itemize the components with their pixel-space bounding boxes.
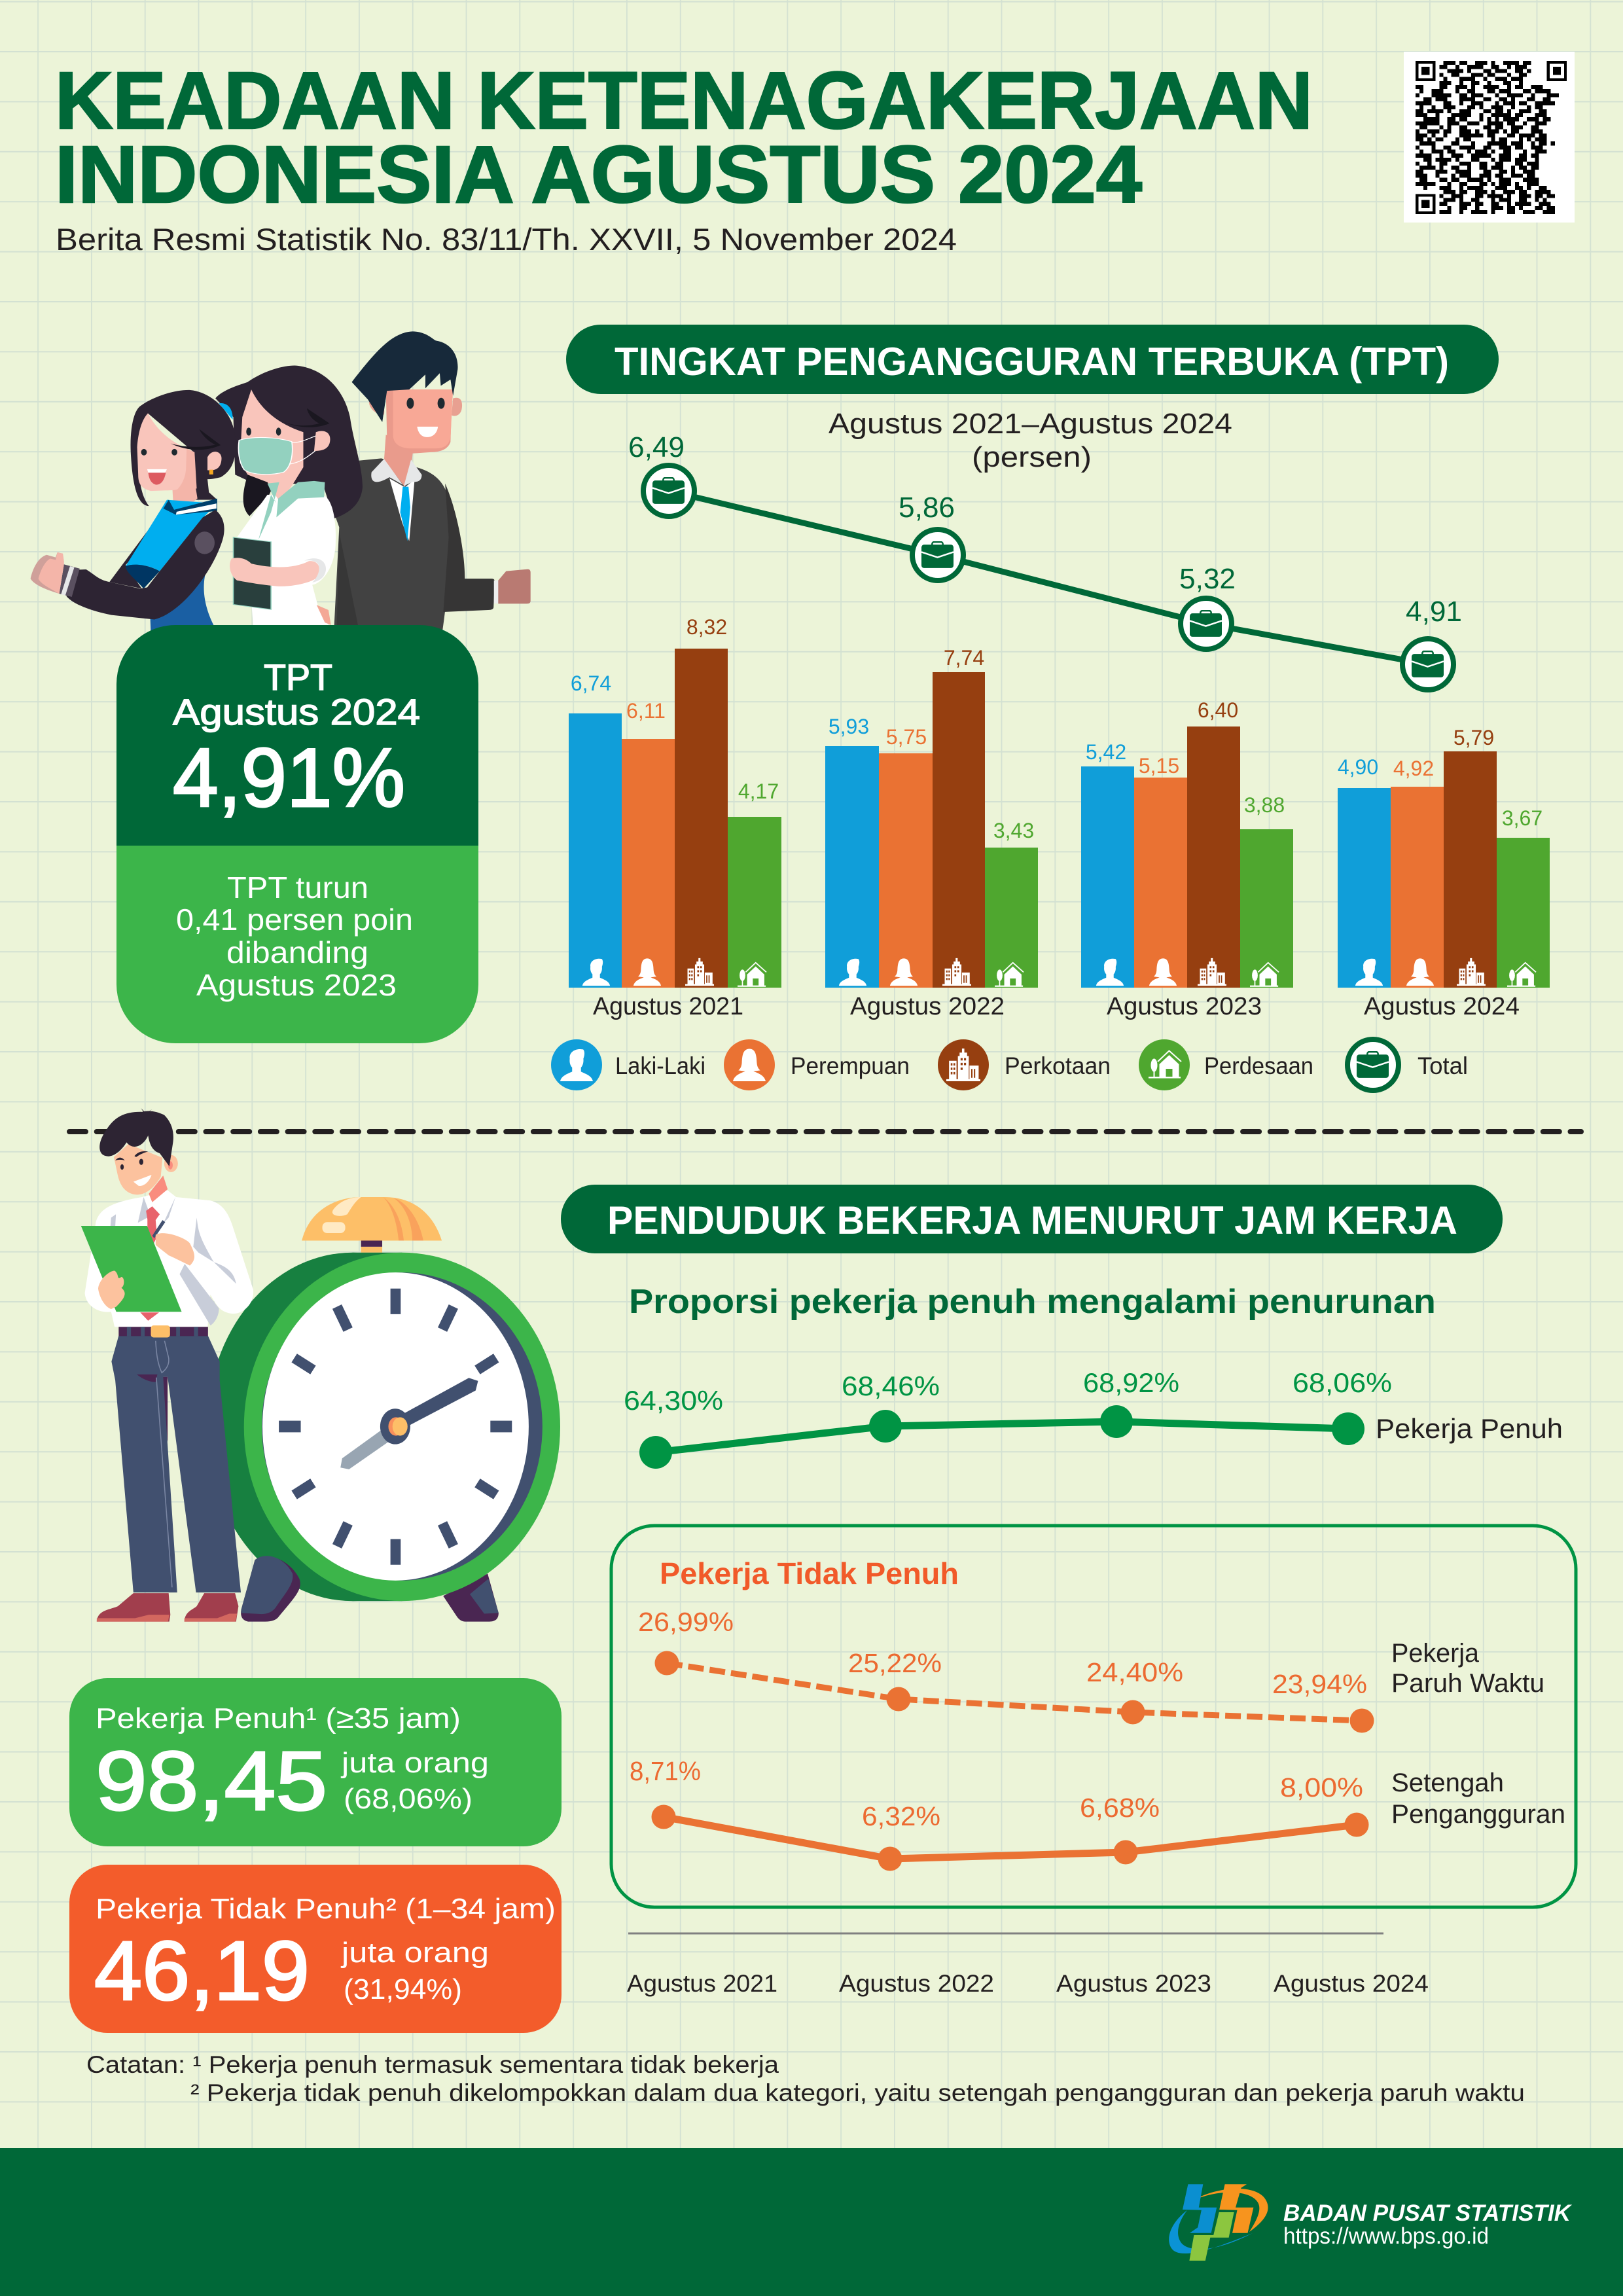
- bars Agustus 2024: 4,90: [1338, 755, 1378, 779]
- man with clipboard: [81, 1108, 253, 1622]
- heading: Tingkat Pengangguran Terbuka: TINGKAT PENGANGGURAN TERBUKA (TPT): [615, 340, 1449, 384]
- comparison note: Agustus 2023: [196, 968, 397, 1002]
- website: https://www.bps.go.id: [1283, 2223, 1489, 2249]
- clock hands: [340, 1378, 478, 1469]
- heading: Penduduk Bekerja Menurut Jam Kerja: PENDUDUK BEKERJA MENURUT JAM KERJA: [607, 1198, 1457, 1242]
- title: [55, 56, 1313, 220]
- bars Agustus 2023: 5,42: [1086, 740, 1126, 764]
- card: pekerja penuh: juta orang: [340, 1747, 489, 1779]
- bars Agustus 2024: 3,67: [1502, 806, 1543, 830]
- line: setengah pengangguran: Pengangguran: [1391, 1800, 1565, 1829]
- card: pekerja tidak penuh: [69, 1865, 562, 2033]
- line: setengah pengangguran: 8,71%: [630, 1756, 701, 1786]
- card: pekerja penuh: (68,06%): [344, 1783, 473, 1815]
- QR code: [1404, 52, 1575, 223]
- year axis labels: Agustus 2021: [627, 1970, 777, 1997]
- card: pekerja tidak penuh: juta orang: [340, 1937, 489, 1969]
- bars Agustus 2022: 5,75: [886, 725, 927, 749]
- line: pekerja paruh waktu: Pekerja: [1391, 1639, 1480, 1668]
- organisation name: BADAN PUSAT STATISTIK: [1283, 2200, 1573, 2226]
- bars Agustus 2024: [1338, 726, 1550, 1020]
- bars Agustus 2021: Agustus 2021: [593, 993, 743, 1020]
- heading: Penduduk Bekerja Menurut Jam Kerja: [561, 1185, 1503, 1253]
- line chart: total TPT: 6,49: [628, 431, 685, 463]
- card: pekerja tidak penuh: (31,94%): [344, 1973, 462, 2005]
- legend: Laki-Laki: Laki-Laki: [615, 1052, 705, 1079]
- year axis labels: Agustus 2023: [1056, 1970, 1211, 1997]
- comparison note: [176, 870, 413, 1002]
- line chart: pekerja penuh: 64,30%: [624, 1385, 723, 1416]
- legend: Perkotaan: Perkotaan: [1005, 1052, 1111, 1079]
- bars Agustus 2023: 3,88: [1244, 793, 1285, 817]
- panel: Pekerja Tidak Penuh: [611, 1526, 1576, 1907]
- chart subtitle: Agustus 2021–Agustus 2024: [829, 408, 1232, 440]
- legend: Total: Total: [1418, 1052, 1468, 1079]
- line chart: pekerja penuh: 68,92%: [1083, 1367, 1179, 1398]
- line chart: pekerja penuh: [624, 1367, 1563, 1469]
- year axis labels: Agustus 2022: [839, 1970, 994, 1997]
- line: pekerja paruh waktu: 25,22%: [848, 1648, 942, 1678]
- heading: Tingkat Pengangguran Terbuka: [566, 325, 1499, 394]
- bars Agustus 2022: 3,43: [993, 819, 1034, 842]
- chart subtitle: [829, 408, 1232, 473]
- clock ticks: [279, 1289, 512, 1565]
- year axis labels: Agustus 2024: [1274, 1970, 1429, 1997]
- card: pekerja penuh: [69, 1678, 562, 1846]
- line chart: pekerja penuh: 68,46%: [842, 1371, 940, 1401]
- line chart: total TPT: 4,91: [1406, 596, 1462, 628]
- panel heading: Pekerja Tidak Penuh: [660, 1556, 959, 1590]
- panel heading: TPT: [264, 656, 332, 698]
- card: pekerja tidak penuh: 46,19: [94, 1924, 310, 2018]
- girl in blue: [31, 390, 236, 631]
- bars Agustus 2022: [825, 646, 1038, 1020]
- footer band: [0, 2148, 1623, 2296]
- chart subtitle: (persen): [972, 441, 1092, 473]
- bars Agustus 2021: 6,11: [626, 699, 666, 723]
- panel: TPT Agustus 2024: [116, 625, 478, 1043]
- alarm clock: [207, 1197, 560, 1622]
- line: pekerja paruh waktu: 26,99%: [638, 1607, 734, 1637]
- bars Agustus 2022: 5,93: [829, 715, 869, 738]
- bars Agustus 2021: 4,17: [738, 780, 779, 803]
- panel heading: Agustus 2024: [173, 691, 420, 732]
- bars Agustus 2024: 5,79: [1454, 726, 1494, 749]
- line: setengah pengangguran: Setengah: [1391, 1768, 1504, 1797]
- comparison note: dibanding: [226, 935, 368, 969]
- card: pekerja penuh: 98,45: [96, 1734, 327, 1828]
- footnotes: [86, 2051, 1525, 2106]
- man in suit: [334, 331, 531, 632]
- line chart: pekerja penuh: Pekerja Penuh: [1376, 1413, 1563, 1444]
- subtitle: Berita Resmi Statistik No. 83/11/Th. XXVII, 5 November 2024: [56, 222, 957, 257]
- line chart: total TPT: 5,32: [1179, 563, 1236, 595]
- bars Agustus 2024: 4,92: [1393, 757, 1434, 780]
- card: pekerja tidak penuh: Pekerja Tidak Penuh² (1–34 jam): [96, 1893, 556, 1925]
- legend: Perdesaan: Perdesaan: [1204, 1052, 1313, 1079]
- BPS logo: [1169, 2184, 1268, 2261]
- title: INDONESIA AGUSTUS 2024: [55, 130, 1142, 220]
- card: pekerja penuh: Pekerja Penuh¹ (≥35 jam): [96, 1702, 461, 1734]
- line chart: pekerja penuh: 68,06%: [1293, 1367, 1392, 1398]
- illustration: man with clock: [81, 1108, 560, 1622]
- legend: Perdesaan: [1139, 1039, 1313, 1090]
- legend: Perempuan: Perempuan: [791, 1052, 910, 1079]
- main figure: 4,91%: [173, 731, 405, 824]
- bars Agustus 2023: 6,40: [1198, 698, 1238, 722]
- line: setengah pengangguran: [630, 1756, 1565, 1871]
- legend: Total: [1347, 1039, 1468, 1090]
- line: setengah pengangguran: 8,00%: [1280, 1772, 1363, 1803]
- bar chart: TPT by group: [569, 615, 1550, 1020]
- footnotes: Catatan: ¹ Pekerja penuh termasuk sementara tidak bekerja: [86, 2051, 779, 2078]
- comparison note: TPT turun: [227, 870, 368, 905]
- comparison note: 0,41 persen poin: [176, 903, 413, 937]
- bars Agustus 2021: [569, 615, 781, 1020]
- legend: [551, 1039, 1468, 1090]
- bars Agustus 2022: Agustus 2022: [850, 993, 1005, 1020]
- legend: Laki-Laki: [551, 1039, 705, 1090]
- panel heading: [173, 656, 420, 732]
- line: pekerja paruh waktu: [638, 1607, 1544, 1733]
- girl with mask: [215, 366, 363, 625]
- line chart: total TPT: 5,86: [899, 492, 955, 524]
- line: pekerja paruh waktu: 23,94%: [1272, 1669, 1367, 1699]
- line: setengah pengangguran: 6,68%: [1080, 1793, 1160, 1823]
- line: pekerja paruh waktu: Paruh Waktu: [1391, 1669, 1544, 1698]
- bars Agustus 2021: 6,74: [571, 672, 611, 695]
- bars Agustus 2023: Agustus 2023: [1107, 993, 1262, 1020]
- title: KEADAAN KETENAGAKERJAAN: [55, 56, 1313, 146]
- line chart: total TPT: [628, 431, 1462, 690]
- line: pekerja paruh waktu: 24,40%: [1086, 1657, 1183, 1687]
- bars Agustus 2023: [1081, 698, 1293, 1020]
- footnotes: ² Pekerja tidak penuh dikelompokkan dalam dua kategori, yaitu setengah pengangguran dan pekerja paruh waktu: [190, 2079, 1525, 2106]
- bars Agustus 2024: Agustus 2024: [1364, 993, 1520, 1020]
- bars Agustus 2023: 5,15: [1139, 754, 1179, 778]
- subheading: Proporsi pekerja penuh mengalami penurunan: [629, 1283, 1436, 1321]
- bars Agustus 2021: 8,32: [687, 615, 727, 639]
- illustration: three workers: [31, 331, 531, 632]
- year axis labels: [627, 1970, 1429, 1997]
- line: setengah pengangguran: 6,32%: [862, 1801, 940, 1831]
- bars Agustus 2022: 7,74: [944, 646, 984, 670]
- legend: Perkotaan: [938, 1039, 1111, 1090]
- legend: Perempuan: [724, 1039, 910, 1090]
